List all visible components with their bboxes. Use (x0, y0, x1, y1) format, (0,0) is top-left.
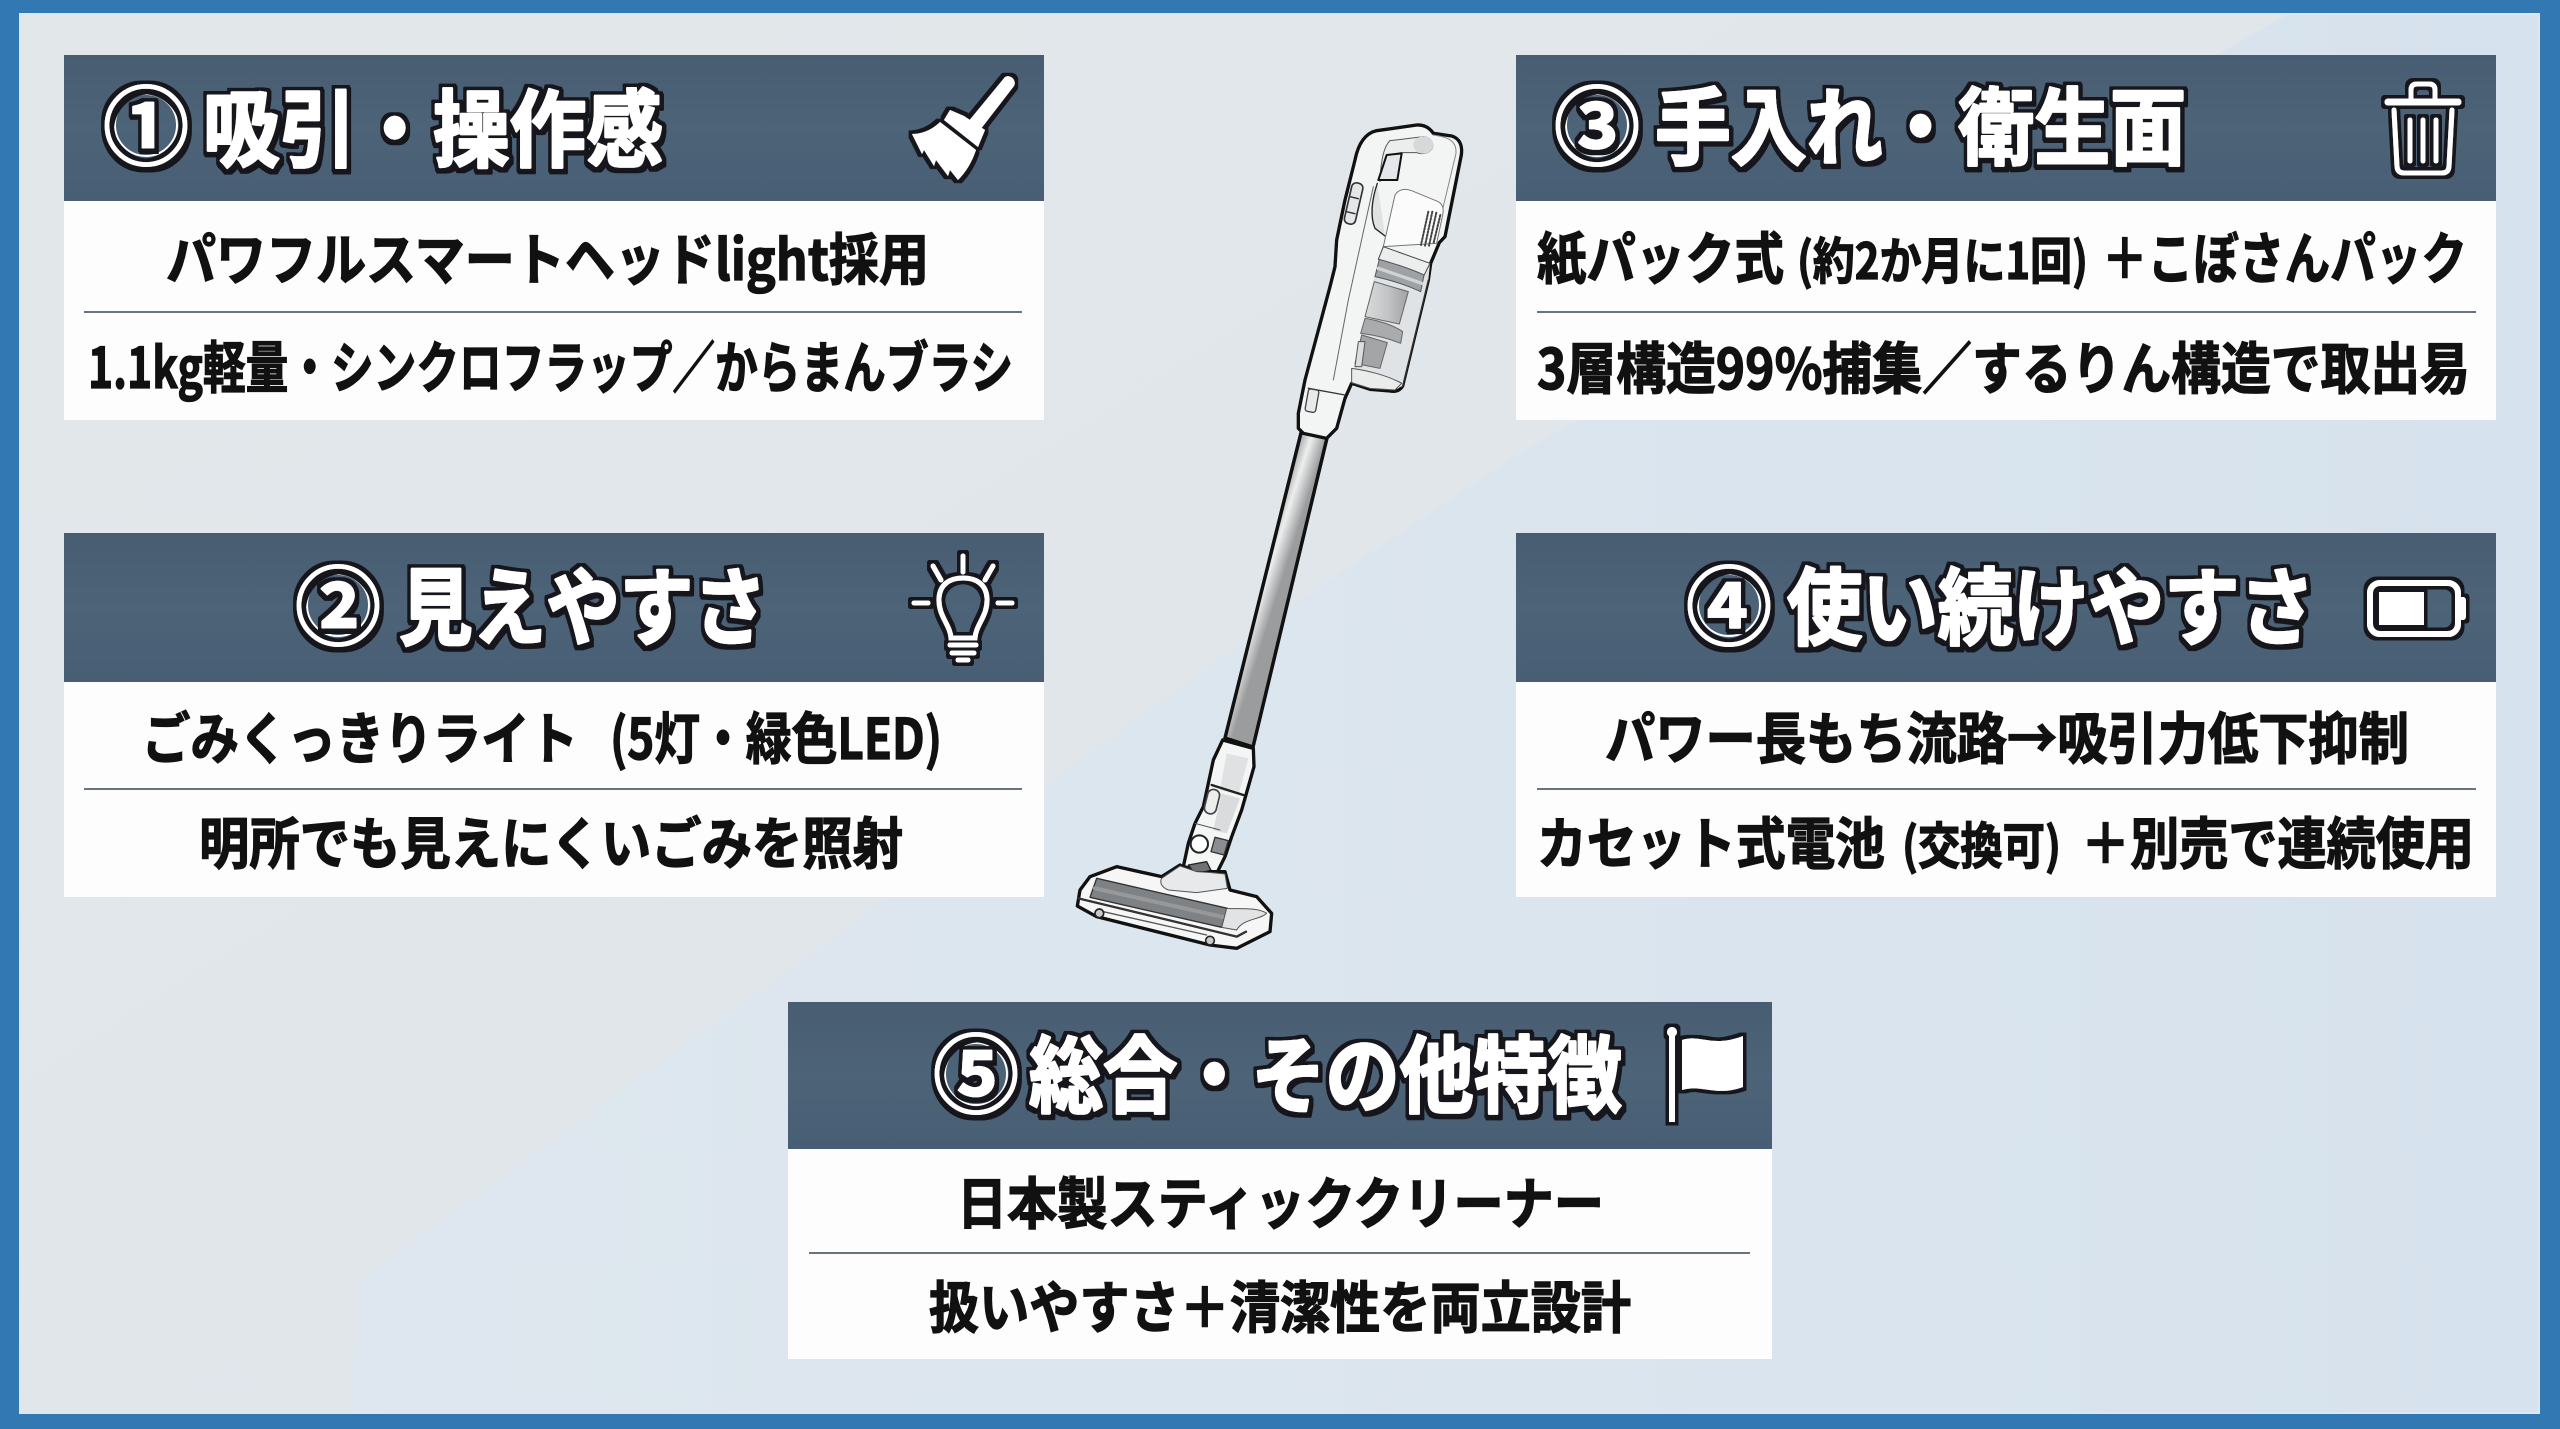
text line 2 (1537, 800, 2474, 881)
text line 1: パワー長もち流路→吸引力低下抑制 (1605, 695, 2409, 776)
heading number: ④ (1686, 538, 1772, 663)
panel: 使い続けやすさ (1516, 533, 2496, 897)
panel: 吸引・操作感 (64, 55, 1044, 420)
illustration: stick vacuum cleaner (1077, 125, 1462, 948)
text line 2: 明所でも見えにくいごみを照射 (199, 800, 903, 881)
heading: 吸引・操作感 (203, 64, 663, 185)
panel header bar (64, 55, 1044, 201)
panel body (64, 200, 1044, 420)
heading: 使い続けやすさ (1787, 542, 2315, 663)
text line 2: 扱いやすさ＋清潔性を両立設計 (929, 1264, 1631, 1345)
text line 1: ＋こぼさんパック (2102, 215, 2467, 296)
text line 2: (交換可) (1902, 807, 2061, 879)
heading number: ③ (1554, 58, 1640, 183)
text line 1 (142, 695, 942, 776)
panel: 手入れ・衛生面 (1516, 55, 2496, 420)
text line 1: (約2か月に1回) (1797, 222, 2088, 294)
panel header bar (1516, 533, 2496, 682)
heading: 総合・その他特徴 (1029, 1010, 1622, 1131)
text line 1: ごみくっきりライト (142, 695, 578, 776)
text line 1: (5灯・緑色LED) (610, 695, 942, 776)
panel header bar (1516, 55, 2496, 201)
icon: battery (2370, 583, 2466, 634)
text line 2: 3層構造99%捕集／するりん構造で取出易 (1537, 325, 2470, 406)
panel header bar (788, 1002, 1772, 1149)
panel body (788, 1149, 1772, 1359)
icon: flag (1667, 1027, 1743, 1122)
heading number: ① (103, 58, 189, 183)
vacuum floor head (1077, 740, 1272, 948)
panel body (1516, 682, 2496, 897)
icon: trash can (2388, 84, 2458, 173)
heading: 見えやすさ (399, 542, 767, 663)
panel: 総合・その他特徴 (788, 1002, 1772, 1359)
heading number: ⑤ (933, 1006, 1019, 1131)
heading number: ② (295, 538, 381, 663)
text line 1: パワフルスマートヘッドlight採用 (166, 216, 929, 297)
panel body (64, 682, 1044, 897)
panel: 見えやすさ (64, 533, 1044, 897)
text line 1: 日本製スティッククリーナー (957, 1160, 1604, 1241)
vacuum body and dust cup (1298, 125, 1462, 438)
icon: light bulb (914, 556, 1012, 660)
vacuum pipe (1225, 430, 1327, 747)
text line 1: 紙パック式 (1537, 215, 1784, 296)
text line 2: 1.1kg軽量・シンクロフラップ／からまんブラシ (88, 324, 1013, 405)
heading: 手入れ・衛生面 (1655, 62, 2186, 183)
panel body (1516, 200, 2496, 420)
text line 2: カセット式電池 (1537, 800, 1885, 881)
text line 1 (1537, 215, 2467, 296)
text line 2: ＋別売で連続使用 (2081, 800, 2474, 881)
icon: broom (912, 76, 1015, 180)
panel header bar (64, 533, 1044, 682)
